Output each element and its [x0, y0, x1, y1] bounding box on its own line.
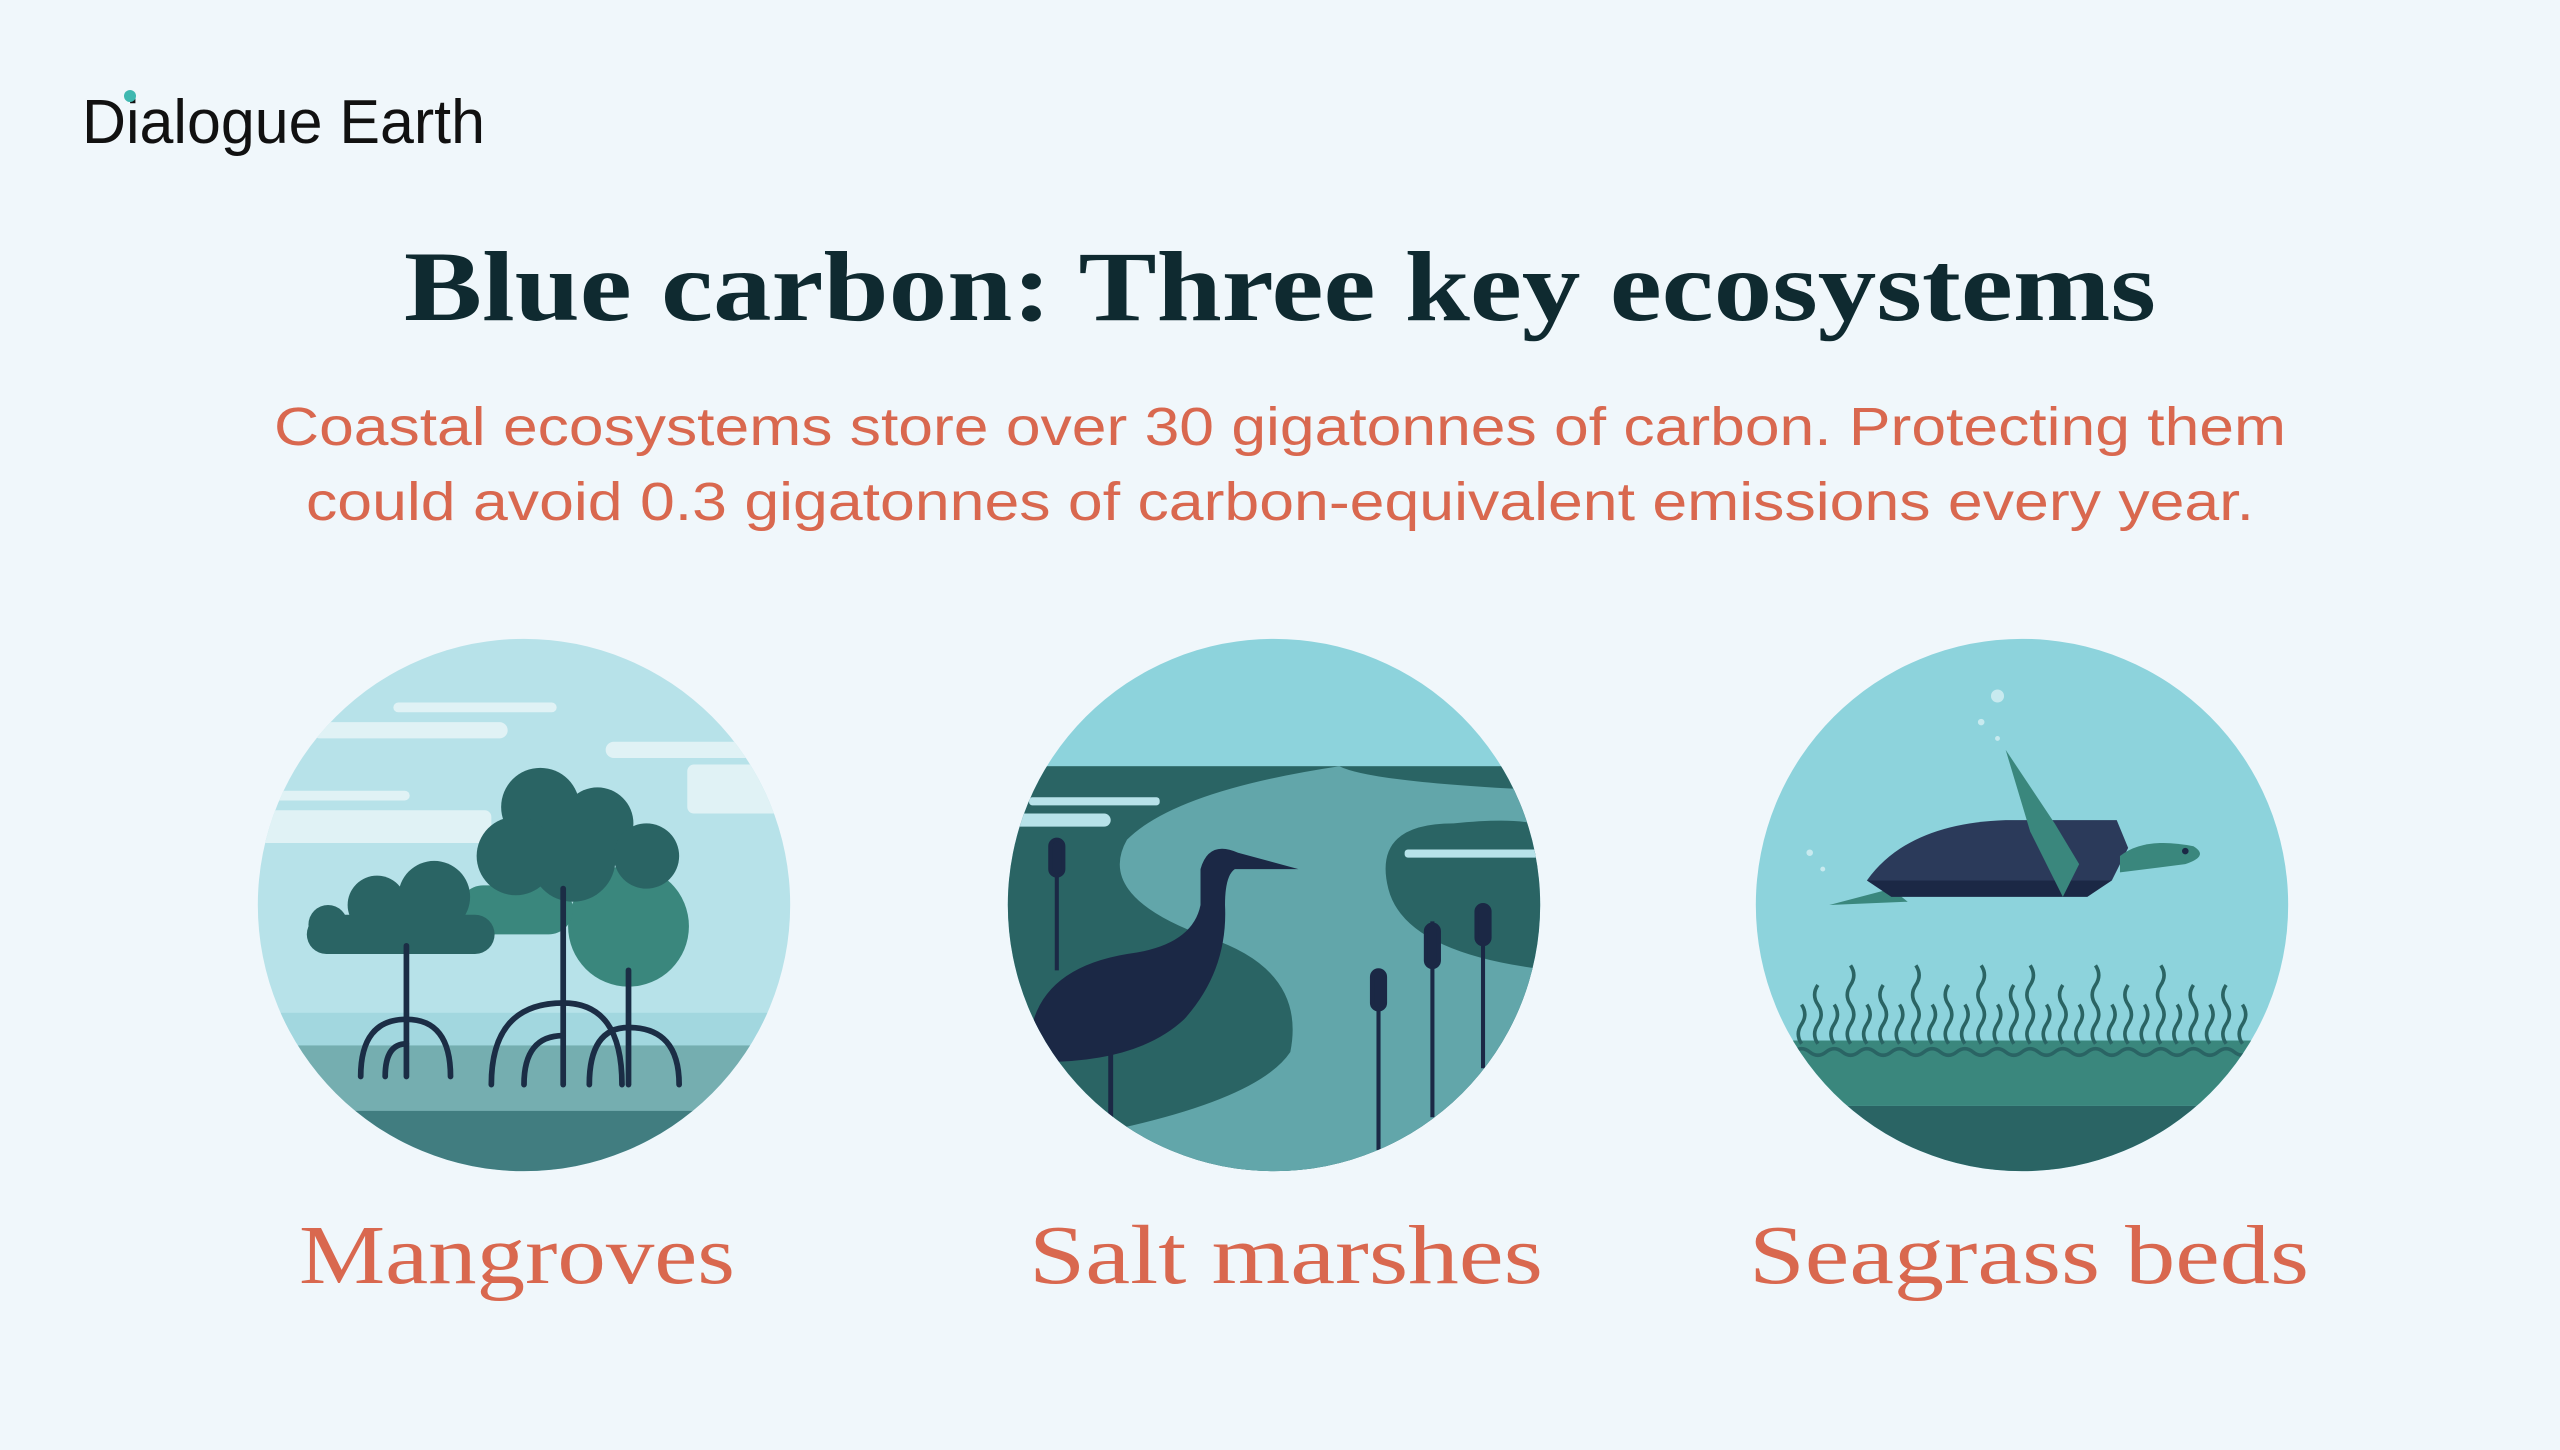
subtitle	[274, 397, 2286, 532]
river	[1120, 766, 1532, 1172]
seagrass	[1793, 965, 2251, 1055]
trees	[568, 866, 689, 987]
heron	[1029, 849, 1298, 1062]
label: seagrass beds: Seagrass beds	[1749, 1209, 2309, 1302]
logo: Dialogue Earth	[82, 88, 485, 157]
roots	[361, 889, 679, 1085]
cattails	[1050, 840, 1490, 1150]
clouds	[246, 703, 802, 843]
panel: mangroves	[258, 638, 790, 1172]
panel: salt marshes	[996, 627, 1552, 1191]
label: salt marshes: Salt marshes	[1029, 1209, 1543, 1302]
label: mangroves: Mangroves	[299, 1209, 735, 1302]
panel: seagrass beds	[1756, 638, 2288, 1172]
subtitle: Coastal ecosystems store over 30 gigatonnes of carbon. Protecting them	[274, 397, 2286, 457]
turtle	[1830, 891, 1908, 905]
subtitle: could avoid 0.3 gigatonnes of carbon-equivalent emissions every year.	[306, 472, 2254, 532]
title: Blue carbon: Three key ecosystems	[404, 231, 2156, 342]
